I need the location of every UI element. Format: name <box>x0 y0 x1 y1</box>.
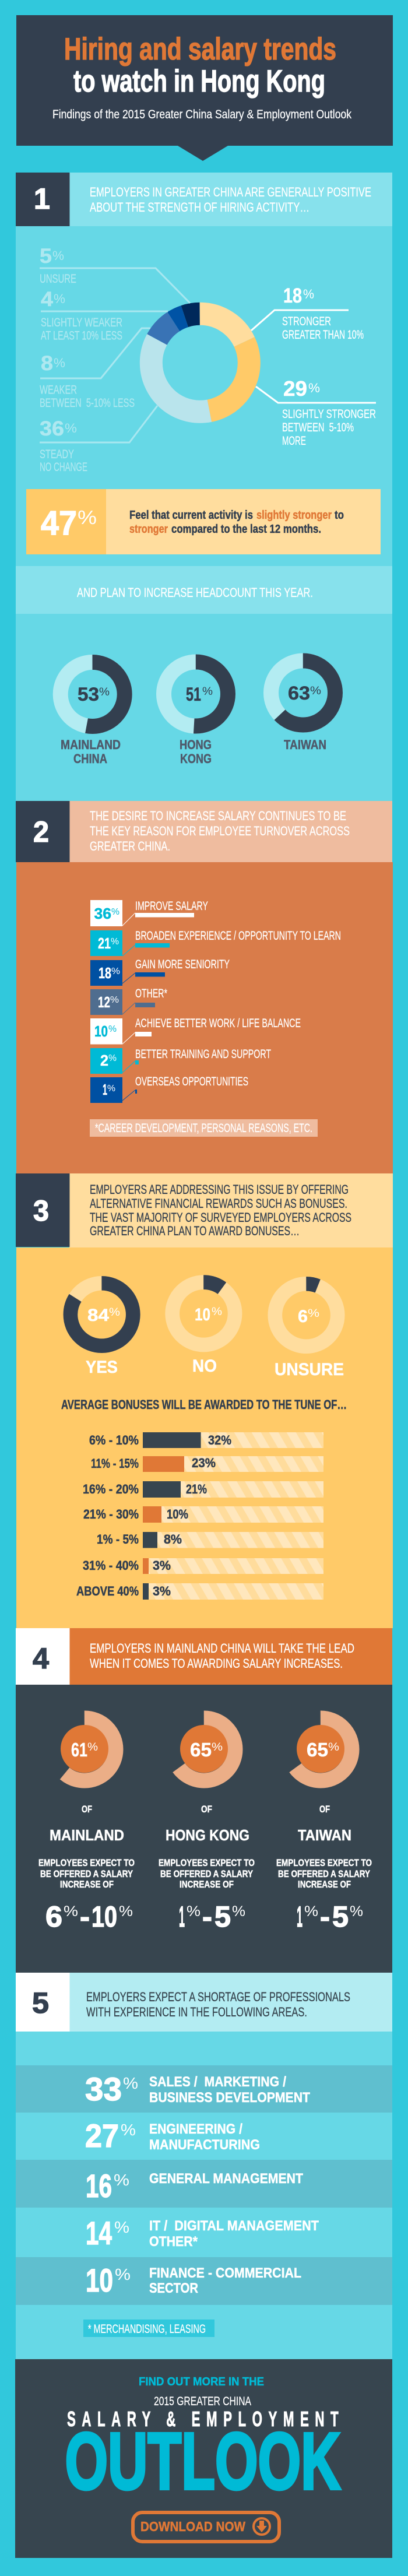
callout: 8% weaker: BETWEEN 5-10% LESS <box>40 396 135 410</box>
section 2 heading: GREATER CHINA. <box>90 839 170 853</box>
donut: Mainland China 53%: 53 <box>78 684 99 705</box>
bar row: 11%-15%: 11% - 15% <box>91 1456 139 1471</box>
donut: yes 84%: YES <box>86 1358 118 1377</box>
panel: title header <box>16 15 393 161</box>
row: engineering 27%: MANUFACTURING <box>149 2137 260 2153</box>
column: Taiwan: EMPLOYEES EXPECT TO <box>276 1857 372 1868</box>
panel: section 4 salary increases <box>16 1628 392 1973</box>
donut: Mainland China 53% <box>61 662 125 766</box>
donut: Hong Kong 51%: KONG <box>180 751 212 766</box>
bar: improve salary 36%: IMPROVE SALARY <box>135 899 208 913</box>
row: IT digital 14%: 14 <box>86 2215 112 2251</box>
column: Mainland <box>38 1718 135 1933</box>
bar row: 1%-5% <box>97 1532 323 1548</box>
row: finance 10%: SECTOR <box>149 2280 198 2296</box>
bar: other 12%: OTHER* <box>135 987 167 1000</box>
callout: 5% unsure <box>40 245 190 303</box>
donut: Taiwan 65% <box>289 1718 352 1780</box>
bar row: 16%-20%: 21% <box>186 1482 207 1496</box>
icon: download arrow <box>254 2518 270 2535</box>
subtitle: Findings of the 2015 Greater China Salary & Employment Outlook <box>52 108 351 121</box>
row: engineering 27%: 27 <box>85 2117 119 2154</box>
title: Hiring and salary trends <box>64 32 336 66</box>
range: 1%-5% Hong Kong: - <box>202 1900 212 1933</box>
section number 1 <box>16 173 70 226</box>
bar row: 16%-20% <box>83 1481 323 1498</box>
bar: better training 2%: 2 <box>100 1052 108 1069</box>
row: IT digital 14% <box>86 2215 319 2251</box>
callout: 47% summary: slightly stronger <box>256 509 332 522</box>
bar: gain more seniority 18%: 18 <box>99 964 111 982</box>
bar row: 1%-5%: 1% - 5% <box>97 1532 139 1547</box>
callout: 36% steady: 36 <box>40 417 64 440</box>
callout: 29% slightly stronger: % <box>308 381 320 395</box>
donut: Mainland 61% <box>54 1718 115 1780</box>
band: plan to increase headcount <box>16 566 392 614</box>
callout: 4% slightly weaker: SLIGHTLY WEAKER <box>41 316 122 329</box>
range: 1%-5% Taiwan: % <box>304 1903 318 1920</box>
bar: better training 2%: BETTER TRAINING AND SUPPORT <box>135 1048 271 1061</box>
donut: yes 84%: 84 <box>87 1306 109 1325</box>
section number 2: 2 <box>33 816 49 848</box>
donut: Mainland 61%: % <box>87 1741 98 1753</box>
donut: Hong Kong 65% <box>173 1718 235 1780</box>
range: 1%-5% Hong Kong: 1 <box>179 1900 185 1933</box>
column: Mainland: OF <box>82 1804 92 1815</box>
callout: 29% slightly stronger <box>256 377 376 448</box>
column: Hong Kong: HONG KONG <box>166 1826 249 1844</box>
callout: 36% steady <box>40 406 157 474</box>
donut: Taiwan 63%: TAIWAN <box>284 737 326 752</box>
callout: 47% summary: Feel that current activity is <box>129 509 253 522</box>
bar: broaden experience 21% <box>90 929 341 956</box>
callout: 18% stronger: % <box>303 287 314 301</box>
range: 1%-5% Hong Kong: 5 <box>214 1900 231 1933</box>
column: Hong Kong: INCREASE OF <box>180 1879 234 1890</box>
callout: 36% steady: NO CHANGE <box>40 461 87 474</box>
column: Taiwan: OF <box>319 1804 330 1815</box>
donut: Mainland China 53%: CHINA <box>73 751 107 766</box>
range: 6%-10%: 10 <box>92 1900 117 1933</box>
bar row: 6%-10%: 32% <box>208 1433 231 1447</box>
bar: improve salary 36%: 36 <box>94 905 111 922</box>
donut chart: hiring activity <box>151 314 249 412</box>
column: Mainland: BE OFFERED A SALARY <box>40 1868 133 1879</box>
column: Mainland: MAINLAND <box>50 1826 124 1844</box>
donut: Taiwan 63% <box>271 661 335 752</box>
callout: 18% stronger: 18 <box>283 284 302 307</box>
bar row: 6%-10% <box>89 1432 323 1448</box>
panel: section 3 bonuses <box>16 1173 393 1628</box>
donut: yes 84%: % <box>109 1306 120 1319</box>
range: 6%-10%: - <box>80 1900 90 1933</box>
footnote: other reasons <box>90 1119 318 1137</box>
bar row: 11%-15%: 23% <box>192 1456 216 1470</box>
donut: unsure 6%: UNSURE <box>275 1360 344 1379</box>
bar: gain more seniority 18%: % <box>111 967 120 976</box>
bar row: 16%-20%: 16% - 20% <box>83 1482 139 1496</box>
callout: 5% unsure: 5 <box>40 245 52 268</box>
row: engineering 27%: % <box>121 2121 136 2139</box>
callout: 5% unsure: % <box>52 248 64 263</box>
row: sales 33%: % <box>123 2074 138 2092</box>
range: 1%-5% Taiwan: 1 <box>297 1900 303 1933</box>
row: engineering 27% <box>85 2117 260 2154</box>
callout: 29% slightly stronger: 29 <box>283 377 307 400</box>
callout: 8% weaker: 8 <box>41 352 53 375</box>
section number 3 <box>16 1173 70 1247</box>
callout: 4% slightly weaker: AT LEAST 10% LESS <box>41 329 122 343</box>
title <box>64 32 336 99</box>
row: general management 16% <box>16 2160 392 2208</box>
section 3 heading <box>90 1182 351 1238</box>
row: sales 33%: 33 <box>85 2071 122 2107</box>
download button <box>133 2512 279 2542</box>
row: general management 16%: % <box>114 2171 129 2189</box>
callout: 8% weaker: WEAKER <box>40 384 77 396</box>
panel: section 2 employee turnover <box>16 801 393 1173</box>
donut: Mainland China 53%: % <box>99 686 110 698</box>
range: 1%-5% Taiwan <box>297 1900 363 1933</box>
donut: Hong Kong 51%: % <box>202 686 213 698</box>
bar row: 6%-10%: 6% - 10% <box>89 1433 139 1447</box>
row: general management 16%: GENERAL MANAGEMENT <box>149 2171 303 2187</box>
range: 6%-10%: 6 <box>45 1900 62 1933</box>
row: finance 10% <box>16 2257 392 2305</box>
section 2 heading <box>90 809 350 853</box>
bar: other 12%: % <box>110 995 119 1005</box>
footnote: other reasons: *CAREER DEVELOPMENT, PERSONAL REASONS, ETC. <box>95 1122 312 1135</box>
bar: improve salary 36%: % <box>111 907 119 917</box>
section number 5 <box>16 1973 70 2032</box>
bar: work life balance 10%: % <box>108 1024 117 1034</box>
callout: 4% slightly weaker <box>41 288 168 343</box>
donut: Hong Kong 65%: 65 <box>190 1739 212 1760</box>
column: Hong Kong: EMPLOYEES EXPECT TO <box>159 1857 255 1868</box>
donut: no 10% <box>173 1282 235 1376</box>
row: engineering 27%: ENGINEERING / <box>149 2121 242 2137</box>
section 3 heading: GREATER CHINA PLAN TO AWARD BONUSES… <box>90 1224 300 1238</box>
callout: 47% summary: to <box>335 509 344 522</box>
callout: 4% slightly weaker: 4 <box>41 288 54 311</box>
section number 4: 4 <box>33 1642 49 1675</box>
callout: 47% summary: stronger <box>129 523 168 536</box>
column: Mainland: EMPLOYEES EXPECT TO <box>38 1857 135 1868</box>
callout: 4% slightly weaker: % <box>54 291 65 306</box>
donut: Hong Kong 51% <box>164 662 228 766</box>
callout: 18% stronger: STRONGER <box>282 315 331 328</box>
bar row: above 40% <box>76 1583 323 1600</box>
bar row: 11%-15% <box>91 1456 323 1472</box>
row: sales 33%: SALES / MARKETING / <box>149 2074 286 2090</box>
row: sales 33% <box>16 2065 392 2113</box>
bar chart: average bonuses <box>76 1432 323 1600</box>
report year line: 2015 GREATER CHINA <box>154 2395 251 2408</box>
callout: 5% unsure: UNSURE <box>40 272 76 286</box>
bar row: 21%-30%: 10% <box>167 1507 188 1521</box>
bar row: above 40%: 3% <box>153 1584 171 1598</box>
range: 6%-10%: % <box>64 1903 78 1920</box>
donut: Taiwan 63%: 63 <box>288 683 310 704</box>
bar: work life balance 10%: 10 <box>94 1022 108 1040</box>
bar row: 21%-30% <box>83 1506 323 1523</box>
donut: unsure 6%: 6 <box>298 1307 308 1326</box>
column: Taiwan: TAIWAN <box>298 1826 351 1844</box>
section 5 heading <box>86 1990 350 2019</box>
panel: footer call to action <box>15 2359 392 2558</box>
donut: Hong Kong 51%: HONG <box>180 737 212 752</box>
bar: overseas opportunities 1% <box>90 1075 248 1103</box>
section number 4 <box>16 1628 70 1685</box>
bar row: 31%-40%: 31% - 40% <box>83 1558 139 1573</box>
panel: section 5 skills shortage <box>16 1973 392 2359</box>
callout: 8% weaker <box>40 328 150 410</box>
section 1 heading <box>90 185 371 215</box>
callout: 36% steady: STEADY <box>40 448 74 461</box>
column: Mainland: INCREASE OF <box>60 1879 114 1890</box>
callout: 36% steady: % <box>65 421 77 435</box>
section 4 heading <box>90 1641 354 1671</box>
range: 1%-5% Taiwan: % <box>350 1903 363 1920</box>
bar: better training 2%: % <box>108 1053 117 1063</box>
donut: no 10%: % <box>212 1306 222 1318</box>
bar row: 31%-40%: 3% <box>153 1558 171 1573</box>
section 5 heading: WITH EXPERIENCE IN THE FOLLOWING AREAS. <box>86 2005 307 2019</box>
donut: unsure 6%: % <box>308 1308 319 1320</box>
callout: 29% slightly stronger: MORE <box>282 434 306 448</box>
section number 1: 1 <box>34 182 50 215</box>
row: finance 10%: 10 <box>86 2262 113 2299</box>
title: to watch in Hong Kong <box>73 64 325 99</box>
row: IT digital 14%: % <box>114 2218 129 2236</box>
section number 3: 3 <box>33 1194 49 1227</box>
row: finance 10%: FINANCE - COMMERCIAL <box>149 2265 301 2281</box>
row: IT digital 14%: OTHER* <box>149 2234 198 2250</box>
column: Hong Kong <box>159 1718 255 1933</box>
column: Taiwan: BE OFFERED A SALARY <box>278 1868 371 1879</box>
column: Hong Kong: BE OFFERED A SALARY <box>160 1868 254 1879</box>
download button: DOWNLOAD NOW <box>140 2519 245 2534</box>
section number 2 <box>16 801 70 862</box>
footnote: merchandising: * MERCHANDISING, LEASING <box>88 2322 206 2336</box>
bar: other 12%: 12 <box>98 993 110 1011</box>
band: plan to increase headcount: AND PLAN TO INCREASE HEADCOUNT THIS YEAR. <box>77 585 313 600</box>
bar: broaden experience 21%: 21 <box>98 934 111 952</box>
row: general management 16%: 16 <box>86 2167 112 2204</box>
range: 1%-5% Hong Kong <box>179 1900 245 1933</box>
section number 5: 5 <box>32 1987 49 2019</box>
donut: yes 84% <box>71 1283 133 1377</box>
report title line: SALARY & EMPLOYMENT <box>67 2408 339 2431</box>
callout: 18% stronger: GREATER THAN 10% <box>282 328 364 342</box>
donut: unsure 6% <box>275 1284 344 1379</box>
bar row: 21%-30%: 21% - 30% <box>83 1507 139 1521</box>
bar: work life balance 10% <box>90 1017 301 1045</box>
bar: overseas opportunities 1%: 1 <box>103 1081 107 1098</box>
find out more line: FIND OUT MORE IN THE <box>139 2375 264 2388</box>
bar: overseas opportunities 1%: % <box>107 1084 115 1094</box>
callout: 29% slightly stronger: BETWEEN 5-10% <box>282 421 354 434</box>
callout: 18% stronger <box>251 284 364 342</box>
range: 6%-10%: % <box>119 1903 133 1920</box>
bar: improve salary 36% <box>90 899 208 926</box>
bar: overseas opportunities 1%: OVERSEAS OPPORTUNITIES <box>135 1075 248 1088</box>
bar row: 1%-5%: 8% <box>164 1532 182 1547</box>
donut: Mainland 61%: 61 <box>71 1739 87 1760</box>
callout: 8% weaker: % <box>54 356 65 370</box>
range: 1%-5% Taiwan: - <box>320 1900 330 1933</box>
donut: Mainland China 53%: MAINLAND <box>61 737 121 752</box>
donut: Hong Kong 51%: 51 <box>186 684 201 705</box>
bar: gain more seniority 18% <box>90 958 230 986</box>
donut: Taiwan 65%: 65 <box>307 1739 328 1760</box>
bar: work life balance 10%: ACHIEVE BETTER WORK / LIFE BALANCE <box>135 1017 301 1030</box>
row: IT digital 14%: IT / DIGITAL MANAGEMENT <box>149 2218 319 2234</box>
bar: better training 2% <box>90 1048 271 1074</box>
donut: Hong Kong 65%: % <box>212 1741 223 1753</box>
column: Taiwan <box>276 1718 372 1933</box>
bar row: 31%-40% <box>83 1558 323 1574</box>
section 1 heading: ABOUT THE STRENGTH OF HIRING ACTIVITY… <box>90 200 309 215</box>
range: 1%-5% Taiwan: 5 <box>332 1900 349 1933</box>
range: 6%-10% <box>45 1900 133 1933</box>
donut: no 10%: NO <box>192 1356 217 1376</box>
range: 1%-5% Hong Kong: % <box>187 1903 201 1920</box>
callout: 47% summary: % <box>78 507 97 528</box>
callout: 47% summary <box>26 489 381 554</box>
bar: broaden experience 21%: % <box>111 937 119 947</box>
callout: 47% summary: 47 <box>41 504 77 542</box>
column: Taiwan: INCREASE OF <box>298 1879 351 1890</box>
bar row: above 40%: ABOVE 40% <box>76 1584 139 1598</box>
callout: 47% summary: compared to the last 12 months. <box>171 523 321 536</box>
panel: section 1 hiring activity <box>16 173 392 801</box>
range: 1%-5% Hong Kong: % <box>232 1903 245 1920</box>
bar: gain more seniority 18%: GAIN MORE SENIORITY <box>135 958 230 971</box>
donut: no 10%: 10 <box>195 1305 210 1324</box>
donut: Taiwan 65%: % <box>328 1741 339 1753</box>
bar: other 12% <box>90 987 167 1015</box>
footnote: merchandising <box>83 2320 214 2337</box>
row: sales 33%: BUSINESS DEVELOPMENT <box>149 2090 310 2106</box>
column: Hong Kong: OF <box>201 1804 212 1815</box>
row: finance 10%: % <box>115 2265 131 2283</box>
donut: Taiwan 63%: % <box>310 685 321 697</box>
